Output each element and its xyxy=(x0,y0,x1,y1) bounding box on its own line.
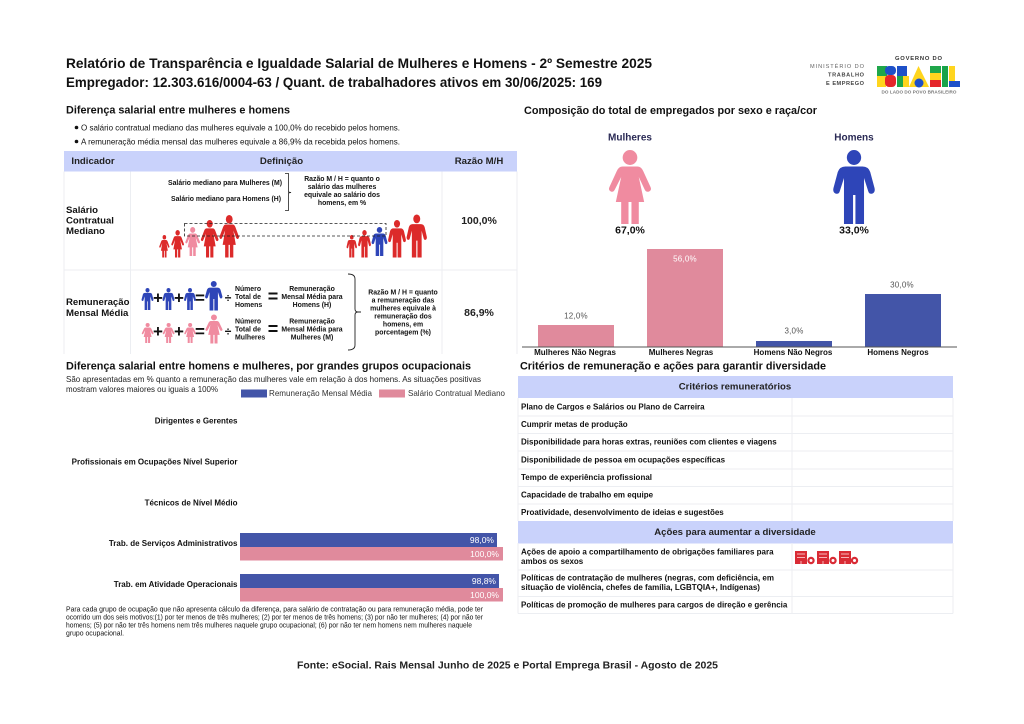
icon: mulheres 67,0% xyxy=(608,132,652,236)
logo: Governo do Brasil: GOVERNO DO xyxy=(895,56,942,62)
title xyxy=(66,55,652,90)
equation: homens xyxy=(142,281,343,310)
definition: salário mediano: homens, em % xyxy=(318,200,366,207)
bar chart: composição por sexo e raça: Homens Negros xyxy=(867,348,929,357)
icon: mulheres 67,0%: 67,0% xyxy=(615,224,646,236)
panel: ações para aumentar a diversidade: Políticas de contratação de mulheres (negras, com deficiência, em xyxy=(521,574,774,582)
logo: Ministério do Trabalho e Emprego xyxy=(810,63,865,87)
bar chart: grupos ocupacionais: Dirigentes e Gerentes xyxy=(155,416,238,426)
title: Empregador: 12.303.616/0004-63 / Quant. de trabalhadores ativos em 30/06/2025: 169 xyxy=(66,74,602,90)
panel: critérios remuneratórios: Plano de Cargos e Salários ou Plano de Carreira xyxy=(521,402,705,412)
bar chart: composição por sexo e raça: Mulheres Não Negras xyxy=(534,348,616,357)
equation: homens: Homens xyxy=(235,302,262,308)
title: Relatório de Transparência e Igualdade Salarial de Mulheres e Homens - 2º Semestre 2025 xyxy=(66,55,652,71)
bracket and ratio text: Razão M / H = quanto xyxy=(368,289,438,296)
panel: critérios remuneratórios xyxy=(518,376,953,521)
bullet text block: A remuneração média mensal das mulheres equivale a 86,9% da recebida pelos homens. xyxy=(81,136,400,146)
bar chart: grupos ocupacionais: 98,8% xyxy=(472,576,496,586)
panel: ações para aumentar a diversidade xyxy=(518,521,953,614)
text: nota de rodapé: Para cada grupo de ocupação que não apresenta cálculo da diferença, para salário de contratação ou para remuneração média, pode ter xyxy=(66,606,484,614)
panel: critérios remuneratórios: Cumprir metas de produção xyxy=(521,420,628,429)
bar chart: grupos ocupacionais: Trab. de Serviços Administrativos xyxy=(109,539,238,548)
text: explicação: São apresentadas em % quanto a remuneração das mulheres vale em relação à dos homens. As situações positivas xyxy=(66,374,481,384)
bracket and ratio text: mulheres equivale à xyxy=(370,305,436,312)
value: razão salário contratual: 100,0% xyxy=(461,215,497,227)
equation: mulheres: Mulheres (M) xyxy=(291,334,333,341)
panel: ações para aumentar a diversidade: ambos os sexos xyxy=(521,557,584,566)
panel: critérios remuneratórios: Critérios remuneratórios xyxy=(679,382,791,392)
equation: mulheres: Número xyxy=(235,318,261,325)
definition: salário mediano: salário das mulheres xyxy=(308,184,376,191)
bar chart: composição por sexo e raça: 56,0% xyxy=(673,254,697,264)
panel: ações para aumentar a diversidade: Políticas de promoção de mulheres para cargos de direção e gerência xyxy=(521,600,788,610)
bar chart: composição por sexo e raça: Homens Não Negros xyxy=(754,348,833,357)
equation: homens: + xyxy=(174,288,184,308)
panel: critérios remuneratórios: Tempo de experiência profissional xyxy=(521,473,652,482)
bar chart: grupos ocupacionais: Profissionais em Ocupações Nível Superior xyxy=(72,458,238,466)
equation: homens: Mensal Média para xyxy=(281,294,343,300)
equation: mulheres: Mulheres xyxy=(235,334,265,341)
heading: critérios: Critérios de remuneração e ações para garantir diversidade xyxy=(520,360,826,372)
definition: salário mediano: Salário mediano para Homens (H) xyxy=(171,196,281,203)
equation: homens: Número xyxy=(235,286,261,292)
icon group: homens ordenados por salário xyxy=(347,214,427,258)
row label: salário contratual mediano: Contratual xyxy=(66,215,114,226)
bullet text block: O salário contratual mediano das mulheres equivale a 100,0% do recebido pelos homens. xyxy=(81,122,400,132)
equation: homens: = xyxy=(195,288,205,308)
bracket and ratio text: homens, em xyxy=(383,321,423,328)
text: explicação: mostram valores maiores ou iguais a 100% xyxy=(66,384,219,394)
fonte: Fonte: eSocial. Rais Mensal Junho de 2025 e Portal Emprega Brasil - Agosto de 2025 xyxy=(297,660,718,672)
definition: salário mediano: equivale ao salário dos xyxy=(304,192,380,199)
bar chart: grupos ocupacionais: 100,0% xyxy=(470,590,499,600)
legend xyxy=(241,389,505,398)
equation: homens: ÷ xyxy=(225,291,232,305)
row label: remuneração mensal média: Mensal Média xyxy=(66,308,129,318)
equation: mulheres: = xyxy=(268,319,278,339)
bracket and ratio text: porcentagem (%) xyxy=(375,329,431,336)
panel: ações para aumentar a diversidade: situação de violência, chefes de família, LGBTQIA+, Indígenas) xyxy=(521,583,760,592)
bar chart: grupos ocupacionais: Técnicos de Nível Médio xyxy=(145,498,238,508)
equation: homens: = xyxy=(268,286,278,306)
icon group: mulheres ordenadas por salário xyxy=(159,215,239,258)
definition: salário mediano xyxy=(168,174,380,210)
legend: Salário Contratual Mediano xyxy=(408,389,505,398)
heading: diferença salarial: Diferença salarial entre mulheres e homens xyxy=(66,104,290,116)
panel: critérios remuneratórios: Disponibilidade de pessoa em ocupações específicas xyxy=(521,456,726,464)
panel: ações para aumentar a diversidade: Ações de apoio a compartilhamento de obrigações familiares para xyxy=(521,548,774,556)
logo: Ministério do Trabalho e Emprego: TRABALHO xyxy=(828,72,865,78)
equation: mulheres xyxy=(142,314,343,344)
bar chart: composição por sexo e raça: 3,0% xyxy=(784,326,804,336)
logo: Ministério do Trabalho e Emprego: E EMPREGO xyxy=(826,81,865,87)
text: nota de rodapé: grupo ocupacional. xyxy=(66,630,124,638)
equation: mulheres: Total de xyxy=(235,326,261,333)
logo: Governo do Brasil xyxy=(877,56,960,94)
bracket and ratio text: remuneração dos xyxy=(374,313,432,320)
equation: mulheres: Mensal Média para xyxy=(281,326,343,333)
text: nota de rodapé: ocorrido um dos seis motivos:(1) por ter menos de três mulheres; (2) por ter menos de três homens; (3) por não ter mulheres; (4) por não ter xyxy=(66,614,484,622)
bar chart: grupos ocupacionais: 100,0% xyxy=(470,549,499,559)
icon: homens 33,0% xyxy=(833,132,875,236)
row label: salário contratual mediano: Mediano xyxy=(66,226,105,237)
legend: Remuneração Mensal Média xyxy=(269,389,372,398)
bar chart: grupos ocupacionais: 98,0% xyxy=(470,535,494,545)
panel: critérios remuneratórios: Proatividade, desenvolvimento de ideias e sugestões xyxy=(521,508,724,517)
table header: Razão M/H xyxy=(455,156,503,167)
bar chart: composição por sexo e raça xyxy=(522,249,957,357)
value: razão remuneração: 86,9% xyxy=(464,307,495,319)
equation: mulheres: = xyxy=(195,322,205,341)
panel: critérios remuneratórios: Capacidade de trabalho em equipe xyxy=(521,490,654,500)
equation: homens: Remuneração xyxy=(289,286,335,292)
row label: salário contratual mediano: Salário xyxy=(66,204,98,216)
definition: salário mediano: Salário mediano para Mulheres (M) xyxy=(168,180,282,187)
bracket and ratio text xyxy=(348,274,438,350)
icon: três selos vermelhos xyxy=(795,551,857,564)
logo: Governo do Brasil: DO LADO DO POVO BRASILEIRO xyxy=(882,90,957,94)
panel: critérios remuneratórios: Disponibilidade para horas extras, reuniões com clientes e viagens xyxy=(521,438,777,446)
panel: tabela de indicadores xyxy=(64,151,517,354)
bracket and ratio text: a remuneração das xyxy=(372,297,435,304)
equation: homens: + xyxy=(153,288,163,308)
icon: homens 33,0%: 33,0% xyxy=(839,224,870,236)
heading: grupos ocupacionais: Diferença salarial entre homens e mulheres, por grandes grupos ocupacionais xyxy=(66,360,471,372)
equation: homens: Homens (H) xyxy=(293,302,331,308)
equation: mulheres: + xyxy=(153,322,163,341)
icon: homens 33,0%: Homens xyxy=(834,132,874,144)
table header: Definição xyxy=(260,156,303,167)
equation: mulheres: ÷ xyxy=(225,324,232,338)
bar chart: composição por sexo e raça: 30,0% xyxy=(890,280,914,290)
equation: homens: Total de xyxy=(235,294,261,300)
text: nota de rodapé xyxy=(66,606,484,638)
bar chart: grupos ocupacionais xyxy=(72,416,503,602)
equation: mulheres: Remuneração xyxy=(289,318,335,325)
bar chart: composição por sexo e raça: Mulheres Negras xyxy=(649,348,714,357)
panel: ações para aumentar a diversidade: Ações para aumentar a diversidade xyxy=(654,527,816,538)
logo: Ministério do Trabalho e Emprego: MINISTÉRIO DO xyxy=(810,63,865,70)
icon: mulheres 67,0%: Mulheres xyxy=(608,132,652,144)
row label: remuneração mensal média: Remuneração xyxy=(66,296,130,308)
text: nota de rodapé: homens; (5) por não ter três homens nem três mulheres naquele grupo ocupacional; (6) por não ter nem homens nem mulheres naquele xyxy=(66,622,472,630)
table header: Indicador xyxy=(71,156,115,167)
equation: mulheres: + xyxy=(174,322,184,341)
table header xyxy=(64,151,517,172)
heading: composição: Composição do total de empregados por sexo e raça/cor xyxy=(524,105,818,117)
bullet text block xyxy=(75,122,400,146)
definition: salário mediano: Razão M / H = quanto o xyxy=(304,176,380,183)
bar chart: grupos ocupacionais: Trab. em Atividade Operacionais xyxy=(114,580,238,589)
bar chart: composição por sexo e raça: 12,0% xyxy=(564,312,588,320)
